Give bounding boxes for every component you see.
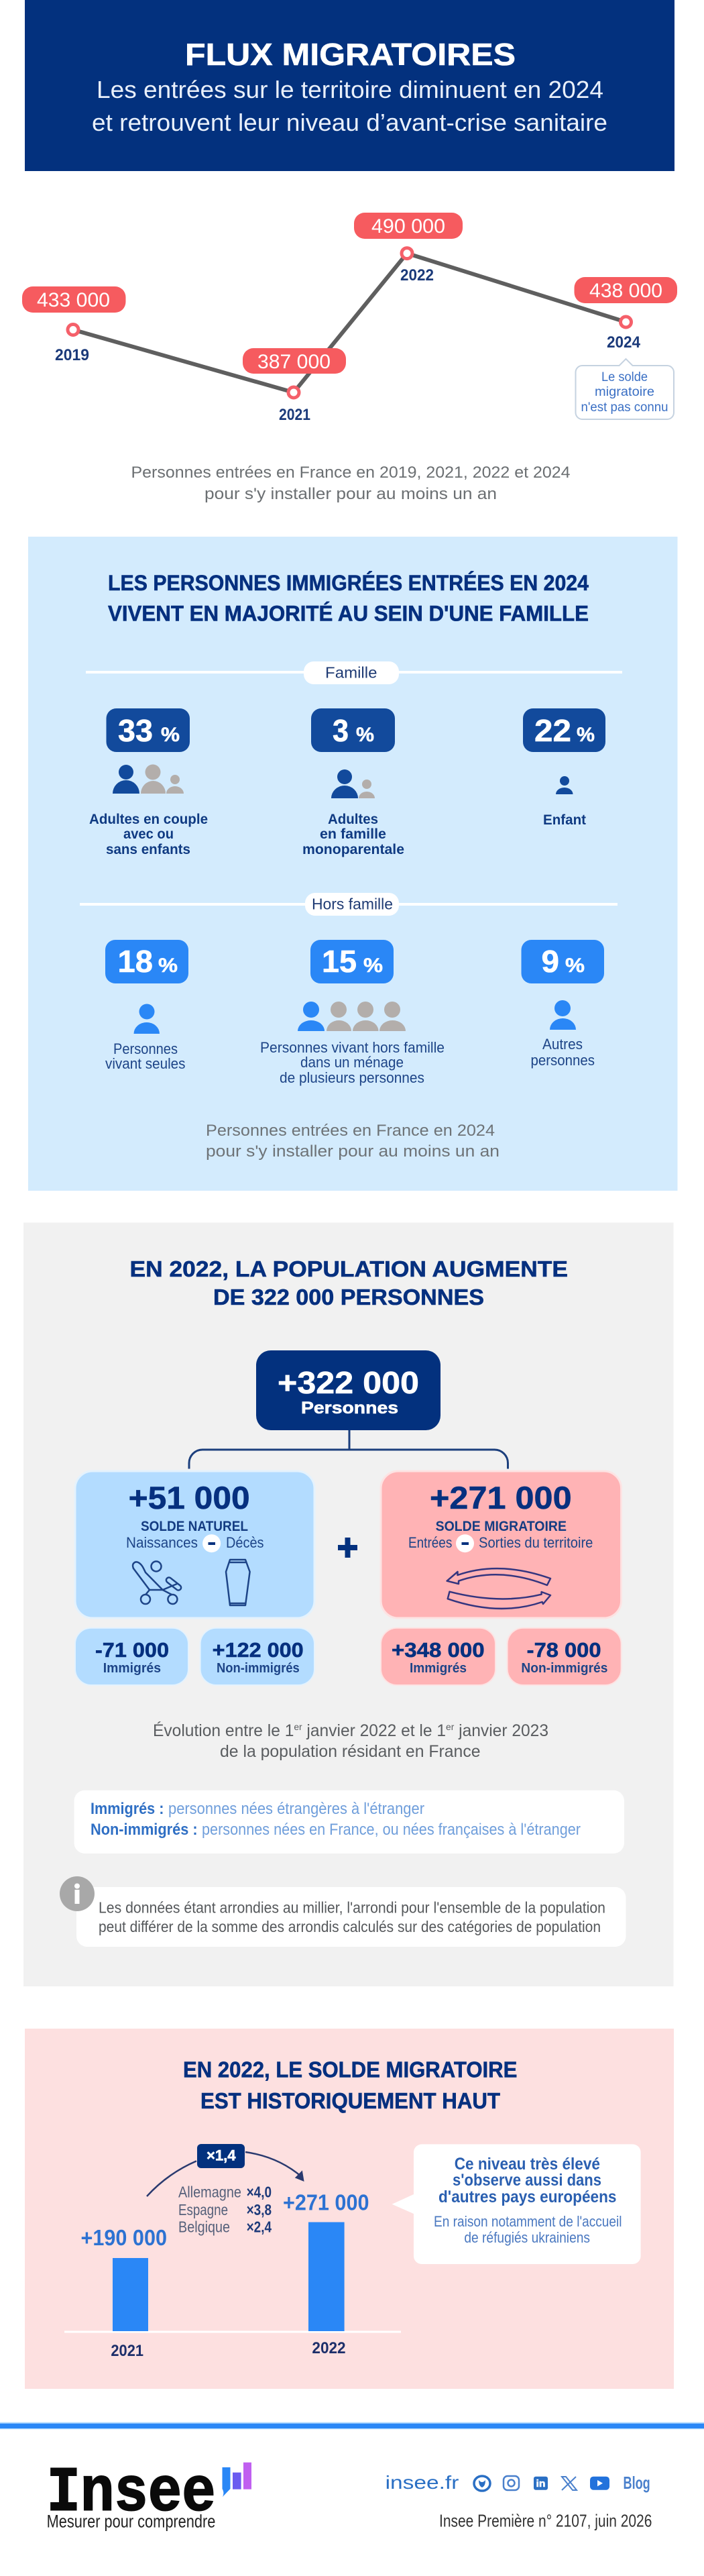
label: adults in couple bbox=[89, 811, 208, 857]
card: solde naturel: Décès bbox=[226, 1534, 264, 1551]
publication reference: Insee Première n° 2107, juin 2026 bbox=[439, 2511, 652, 2531]
chart caption bbox=[131, 464, 570, 503]
icon label: blog: Blog bbox=[624, 2473, 650, 2493]
card: solde naturel bbox=[75, 1471, 314, 1618]
label: adults in couple: Adultes en couple bbox=[89, 811, 208, 827]
year labels: 2022 bbox=[312, 2339, 346, 2357]
heading bbox=[130, 1256, 568, 1309]
caption: de la population résidant en France bbox=[220, 1742, 480, 1761]
growth arrow bbox=[147, 2152, 303, 2196]
heading bbox=[108, 571, 589, 626]
icon: X bbox=[562, 2477, 577, 2490]
stat: 3 %: 3 bbox=[333, 713, 349, 748]
caption: er bbox=[294, 1721, 302, 1732]
year labels bbox=[55, 266, 641, 424]
value 2019: 433 000 bbox=[37, 289, 110, 311]
stat: 22 % bbox=[523, 708, 605, 752]
heading: DE 322 000 PERSONNES bbox=[213, 1285, 484, 1309]
value labels: +271 000 bbox=[283, 2190, 369, 2215]
icon: info bbox=[60, 1876, 95, 1911]
stat: 22 %: 22 bbox=[534, 713, 571, 748]
subtitle: Les entrées sur le territoire diminuent en 2024 bbox=[97, 76, 603, 103]
multiplier badge: ×1,4 bbox=[207, 2147, 236, 2164]
icon: child bbox=[556, 776, 573, 794]
icon: linkedin: in bbox=[536, 2478, 546, 2489]
label: living alone bbox=[105, 1040, 185, 1072]
stat: 9 %: 9 bbox=[542, 944, 559, 979]
logo: Insee: Insee bbox=[47, 2459, 216, 2530]
sub-card: migration immigrants: +348 000 bbox=[392, 1638, 485, 1662]
icon: stroller bbox=[133, 1562, 182, 1604]
stat: 9 % bbox=[522, 940, 604, 983]
callout: europe: En raison notamment de l'accueil bbox=[434, 2213, 622, 2230]
bar chart bbox=[64, 2190, 401, 2360]
divider label: Hors famille: Hors famille bbox=[312, 895, 393, 912]
sub-card: natural non-immigrants: +122 000 bbox=[213, 1638, 304, 1662]
stat: 18 % bbox=[105, 940, 188, 983]
callout: europe: s'observe aussi dans bbox=[453, 2171, 601, 2190]
stat: 9 %: % bbox=[565, 955, 585, 977]
label: single parent: en famille bbox=[320, 826, 386, 842]
sub-card: migration non-immigrants: -78 000 bbox=[527, 1638, 601, 1662]
definitions box bbox=[74, 1790, 624, 1854]
icon: round social badge bbox=[474, 2476, 490, 2491]
year labels: 2024 bbox=[607, 333, 641, 352]
european countries list: Belgique bbox=[178, 2218, 230, 2235]
stat: 18 %: 18 bbox=[118, 944, 153, 979]
sub-card: migration non-immigrants bbox=[508, 1628, 622, 1685]
stat: 15 %: 15 bbox=[322, 944, 357, 979]
label: shared household: Personnes vivant hors famille bbox=[260, 1039, 445, 1056]
label: other persons: personnes bbox=[531, 1052, 595, 1069]
caption: Évolution entre le 1 bbox=[153, 1721, 296, 1740]
value 2021 bbox=[243, 348, 346, 374]
caption: er bbox=[446, 1721, 455, 1732]
caption: janvier 2022 et le 1 bbox=[302, 1721, 446, 1740]
year labels: 2019 bbox=[55, 346, 89, 364]
stat: 3 %: % bbox=[356, 724, 374, 746]
divider label: Famille: Famille bbox=[325, 664, 377, 682]
european countries list: Espagne bbox=[178, 2201, 228, 2218]
label: shared household: de plusieurs personnes bbox=[280, 1069, 424, 1086]
icon: migration arrows bbox=[447, 1568, 550, 1609]
stat: 22 %: % bbox=[577, 724, 595, 746]
sub-card: natural immigrants: -71 000 bbox=[95, 1638, 169, 1662]
sub-card: migration immigrants bbox=[381, 1628, 495, 1685]
definitions box: Immigrés : bbox=[91, 1800, 164, 1818]
icon: coffin bbox=[226, 1560, 250, 1605]
callout: solde migratoire unknown bbox=[575, 359, 674, 419]
icon: other person bbox=[550, 1000, 576, 1030]
european countries list: Allemagne bbox=[178, 2184, 241, 2201]
panel: historic high bbox=[25, 2029, 674, 2389]
sub-card: migration immigrants: Immigrés bbox=[410, 1661, 467, 1676]
heading: EN 2022, LA POPULATION AUGMENTE bbox=[130, 1256, 568, 1281]
panel caption bbox=[206, 1122, 500, 1161]
card: solde naturel: +51 000 bbox=[129, 1480, 250, 1515]
panel caption: pour s'y installer pour au moins un an bbox=[206, 1142, 500, 1161]
sub-card: migration non-immigrants: Non-immigrés bbox=[521, 1661, 607, 1676]
value labels: +190 000 bbox=[80, 2225, 167, 2250]
callout: europe: Ce niveau très élevé bbox=[455, 2155, 600, 2174]
callout: europe bbox=[392, 2144, 641, 2264]
label: shared household: dans un ménage bbox=[300, 1054, 404, 1071]
heading bbox=[183, 2057, 517, 2113]
connector tree bbox=[189, 1430, 508, 1469]
label: child: Enfant bbox=[543, 812, 586, 828]
label: adults in couple: sans enfants bbox=[106, 841, 190, 857]
card: solde migratoire: Sorties du territoire bbox=[479, 1534, 593, 1551]
heading: LES PERSONNES IMMIGRÉES ENTRÉES EN 2024 bbox=[108, 571, 589, 595]
value 2022 bbox=[354, 213, 463, 239]
total box bbox=[256, 1350, 441, 1430]
label: shared household bbox=[260, 1039, 445, 1086]
chart caption: Personnes entrées en France en 2019, 2021, 2022 et 2024 bbox=[131, 464, 570, 482]
value labels bbox=[80, 2190, 369, 2250]
multiplier badge bbox=[197, 2144, 245, 2168]
value 2021: 387 000 bbox=[257, 351, 331, 373]
sub-card: natural immigrants bbox=[75, 1628, 188, 1685]
line chart: entries 2019-2024 bbox=[22, 213, 677, 424]
header banner bbox=[25, 0, 674, 171]
minus badge bbox=[202, 1534, 221, 1552]
label: living alone: Personnes bbox=[113, 1040, 178, 1057]
card: solde naturel: Naissances bbox=[126, 1534, 198, 1551]
label: single parent bbox=[302, 811, 404, 857]
bar 2021 bbox=[113, 2258, 148, 2331]
website link: insee.fr bbox=[386, 2472, 459, 2493]
stat: 15 %: % bbox=[363, 955, 383, 977]
card: solde migratoire bbox=[381, 1471, 622, 1618]
definitions box: Non-immigrés : bbox=[91, 1821, 198, 1839]
stat: 3 % bbox=[311, 708, 395, 752]
icon: youtube bbox=[590, 2477, 609, 2490]
caption: janvier 2023 bbox=[454, 1721, 548, 1740]
card: solde naturel: SOLDE NATUREL bbox=[141, 1519, 248, 1534]
footer rule bbox=[0, 2422, 704, 2429]
definitions box: personnes nées en France, ou nées françaises à l'étranger bbox=[202, 1821, 581, 1839]
total box: +322 000 bbox=[278, 1365, 419, 1400]
stat: 15 % bbox=[310, 940, 394, 983]
title: FLUX MIGRATOIRES bbox=[185, 37, 516, 72]
card: solde migratoire: +271 000 bbox=[430, 1480, 572, 1515]
icon: linkedin bbox=[534, 2477, 548, 2490]
label: other persons bbox=[531, 1036, 595, 1069]
note box: Les données étant arrondies au millier, l'arrondi pour l'ensemble de la population bbox=[99, 1899, 605, 1917]
european countries list: ×3,8 bbox=[247, 2201, 272, 2218]
value 2024 bbox=[574, 277, 677, 303]
caption bbox=[153, 1721, 548, 1761]
year labels: 2021 bbox=[279, 406, 310, 424]
value 2024: 438 000 bbox=[589, 280, 662, 302]
stat: 33 %: 33 bbox=[118, 713, 153, 748]
year labels bbox=[111, 2339, 346, 2360]
subtitle bbox=[92, 76, 607, 136]
value 2019 bbox=[22, 286, 126, 313]
note box bbox=[76, 1887, 626, 1947]
stat: 33 %: % bbox=[161, 724, 180, 746]
panel caption: Personnes entrées en France en 2024 bbox=[206, 1122, 495, 1140]
label: single parent: monoparentale bbox=[302, 841, 404, 857]
plus sign bbox=[338, 1538, 357, 1558]
heading: EN 2022, LE SOLDE MIGRATOIRE bbox=[183, 2057, 517, 2082]
label: single parent: Adultes bbox=[328, 811, 378, 827]
icon: person alone bbox=[134, 1004, 160, 1034]
definitions box: personnes nées étrangères à l'étranger bbox=[168, 1800, 424, 1818]
european countries list bbox=[178, 2184, 272, 2235]
european countries list: ×4,0 bbox=[247, 2184, 272, 2201]
divider label: Famille bbox=[86, 661, 622, 684]
stat: 18 %: % bbox=[158, 955, 178, 977]
heading: VIVENT EN MAJORITÉ AU SEIN D'UNE FAMILLE bbox=[108, 602, 589, 626]
european countries list: ×2,4 bbox=[247, 2218, 272, 2235]
note box: peut différer de la somme des arrondis calculés sur des catégories de population bbox=[99, 1918, 601, 1935]
divider label: Hors famille bbox=[80, 893, 618, 916]
icon: single parent bbox=[331, 769, 375, 798]
bar 2022 bbox=[308, 2222, 345, 2331]
social icons bbox=[474, 2473, 650, 2493]
panel: population growth bbox=[23, 1222, 673, 1986]
card: solde migratoire: SOLDE MIGRATOIRE bbox=[436, 1519, 567, 1534]
chart caption: pour s'y installer pour au moins un an bbox=[204, 485, 497, 503]
icon: group household bbox=[298, 1002, 406, 1031]
label: adults in couple: avec ou bbox=[123, 826, 174, 842]
callout: europe: de réfugiés ukrainiens bbox=[464, 2229, 590, 2246]
subtitle: et retrouvent leur niveau d’avant-crise sanitaire bbox=[92, 109, 607, 136]
minus badge bbox=[456, 1534, 474, 1552]
sub-card: natural immigrants: Immigrés bbox=[103, 1661, 161, 1676]
label: other persons: Autres bbox=[542, 1036, 583, 1053]
card: solde migratoire: Entrées bbox=[408, 1534, 452, 1551]
year labels: 2021 bbox=[111, 2342, 143, 2360]
sub-card: natural non-immigrants: Non-immigrés bbox=[217, 1661, 300, 1676]
total box: Personnes bbox=[301, 1399, 398, 1417]
callout: solde migratoire unknown: Le solde bbox=[601, 370, 648, 384]
icon: instagram bbox=[504, 2476, 519, 2490]
heading: EST HISTORIQUEMENT HAUT bbox=[200, 2088, 500, 2113]
panel: household composition bbox=[28, 537, 677, 1191]
label: living alone: vivant seules bbox=[105, 1055, 185, 1072]
tagline: Mesurer pour comprendre bbox=[47, 2511, 215, 2531]
value 2022: 490 000 bbox=[371, 215, 445, 237]
callout: solde migratoire unknown: migratoire bbox=[595, 385, 654, 399]
stat: 33 % bbox=[106, 708, 190, 752]
callout: solde migratoire unknown: n'est pas connu bbox=[581, 400, 668, 415]
year labels: 2022 bbox=[400, 266, 434, 284]
logo bars bbox=[223, 2463, 251, 2497]
icon: couple with children bbox=[113, 765, 184, 794]
callout: europe: d'autres pays européens bbox=[438, 2188, 617, 2206]
sub-card: natural non-immigrants bbox=[200, 1628, 314, 1685]
